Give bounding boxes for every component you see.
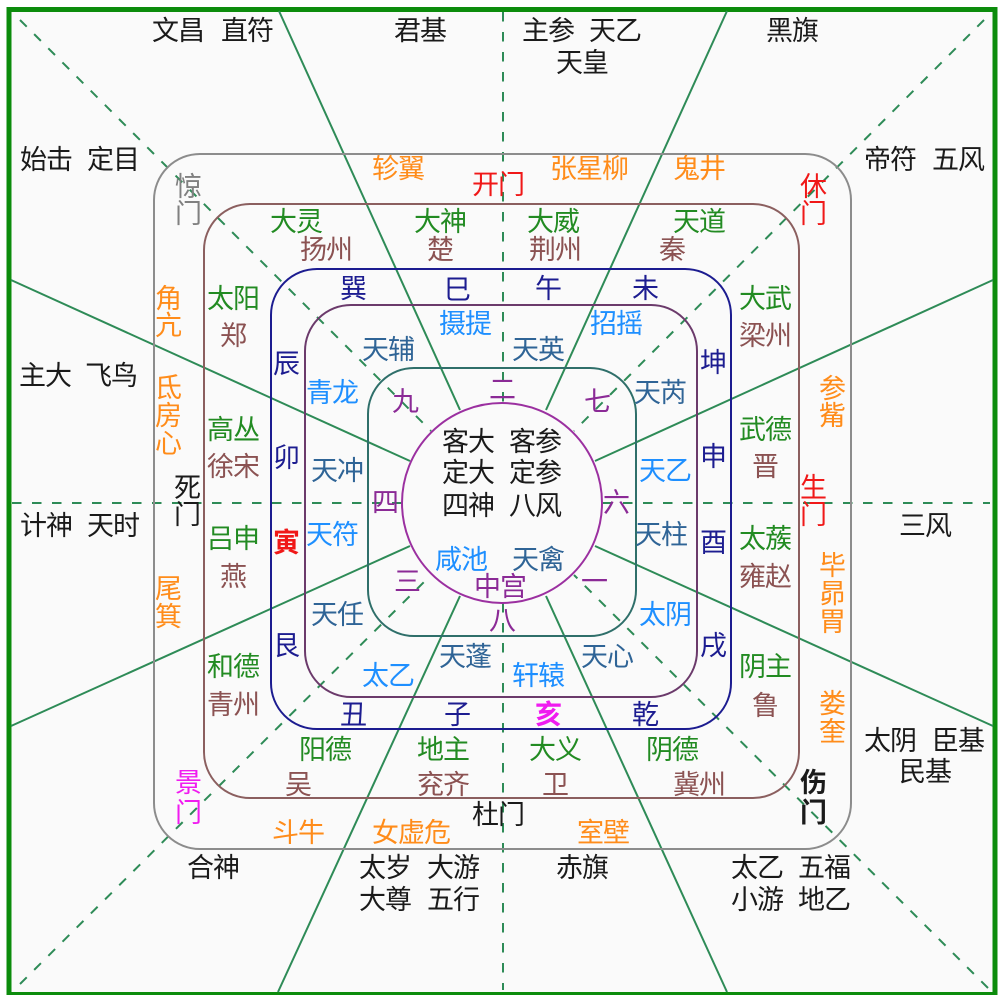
outer black labels: 直符 <box>221 16 273 46</box>
blue branch labels: 坤 <box>700 348 726 378</box>
brown region labels: 扬州 <box>300 235 352 265</box>
eight gates: 生 <box>800 473 826 503</box>
purple palace numbers: 七 <box>584 387 610 417</box>
eight gates: 惊 <box>175 172 201 202</box>
brown region labels: 徐宋 <box>207 452 260 482</box>
outer black labels: 五风 <box>932 145 985 175</box>
outer black labels: 五行 <box>427 885 479 915</box>
green deity labels <box>207 207 792 765</box>
green deity labels: 吕申 <box>207 524 259 554</box>
light blue star labels: 咸池 <box>435 545 487 575</box>
green deity labels: 和德 <box>207 652 259 682</box>
purple palace numbers: 四 <box>372 488 398 518</box>
blue branch labels: 亥 <box>535 700 561 730</box>
outer black labels: 大游 <box>427 853 479 883</box>
blue branch labels: 乾 <box>632 700 659 730</box>
outer black labels: 三风 <box>899 511 952 541</box>
steel blue star labels <box>311 335 687 672</box>
eight gates: 门 <box>175 798 201 828</box>
orange constellation labels: 昴 <box>819 579 845 609</box>
outer black labels: 合神 <box>187 853 239 883</box>
outer black labels: 天时 <box>87 511 139 541</box>
eight gates: 门 <box>800 199 826 229</box>
steel blue star labels: 天冲 <box>311 456 363 486</box>
light blue star labels: 招摇 <box>590 309 642 339</box>
light blue star labels: 青龙 <box>306 378 358 408</box>
brown region labels: 郑 <box>220 321 247 351</box>
center text block: 客参 <box>509 427 562 457</box>
orange constellation labels: 鬼井 <box>673 154 725 184</box>
brown region labels: 梁州 <box>739 321 791 351</box>
eight gates: 门 <box>800 798 826 828</box>
center text block <box>442 427 562 521</box>
outer black labels: 民基 <box>899 757 952 787</box>
outer black labels: 臣基 <box>932 726 985 756</box>
outer black labels: 五福 <box>798 853 850 883</box>
green deity labels: 太阳 <box>207 284 259 314</box>
eight gates: 门 <box>800 500 826 530</box>
purple palace numbers: 六 <box>603 488 629 518</box>
blue branch labels: 寅 <box>273 528 299 558</box>
green deity labels: 阴主 <box>739 652 791 682</box>
outer black labels: 小游 <box>731 885 783 915</box>
green deity labels: 阳德 <box>299 735 351 765</box>
orange constellation labels: 轸翼 <box>372 154 424 184</box>
purple palace numbers: 二 <box>489 375 515 405</box>
blue branch labels: 巳 <box>444 275 470 305</box>
ring: brown <box>204 204 799 798</box>
eight gates: 门 <box>174 500 200 530</box>
steel blue star labels: 天任 <box>311 600 363 630</box>
outer black labels: 主大 <box>19 361 71 391</box>
steel blue star labels: 天英 <box>512 335 565 365</box>
green deity labels: 大威 <box>527 207 580 237</box>
blue branch labels: 子 <box>444 700 470 730</box>
outer black labels: 君基 <box>394 16 447 46</box>
orange constellation labels: 女虚危 <box>372 818 450 848</box>
outer black labels: 太阴 <box>864 726 916 756</box>
blue branch labels: 卯 <box>273 443 299 473</box>
blue branch labels: 艮 <box>273 631 300 661</box>
center text block: 八风 <box>509 491 562 521</box>
light blue star labels <box>306 309 691 691</box>
brown region labels: 燕 <box>220 562 246 592</box>
ring: purple <box>305 305 697 697</box>
eight gates: 休 <box>800 172 827 202</box>
orange constellation labels: 尾 <box>155 574 181 604</box>
outer black labels: 始击 <box>20 145 72 175</box>
orange constellation labels: 氐 <box>155 373 181 403</box>
brown region labels: 卫 <box>542 770 568 800</box>
light blue star labels: 太乙 <box>362 661 414 691</box>
green deity labels: 太蔟 <box>739 524 791 554</box>
orange constellation labels: 胃 <box>819 607 845 637</box>
eight gates <box>174 170 827 830</box>
orange constellation labels: 斗牛 <box>272 818 324 848</box>
purple palace numbers: 九 <box>392 387 419 417</box>
brown region labels: 荆州 <box>529 235 581 265</box>
orange constellation labels: 张星柳 <box>550 154 628 184</box>
brown region labels: 鲁 <box>752 691 778 721</box>
purple palace numbers <box>372 375 629 636</box>
brown region labels <box>207 235 792 800</box>
center text block: 定大 <box>442 458 494 488</box>
light blue star labels: 太阴 <box>639 600 691 630</box>
green deity labels: 阴德 <box>646 735 698 765</box>
outer black labels: 主参 <box>522 16 575 46</box>
orange constellation labels: 室壁 <box>577 818 629 848</box>
orange constellation labels: 觜 <box>819 401 845 431</box>
orange constellation labels: 房 <box>155 401 181 431</box>
blue branch labels: 丑 <box>340 700 366 730</box>
outer black labels: 黑旗 <box>766 16 818 46</box>
purple palace numbers: 一 <box>581 567 607 597</box>
steel blue star labels: 天柱 <box>635 520 687 550</box>
outer black labels: 计神 <box>20 511 72 541</box>
orange constellation labels: 奎 <box>819 717 846 747</box>
light blue star labels: 天乙 <box>639 456 691 486</box>
center circle <box>402 403 602 603</box>
brown region labels: 秦 <box>659 235 686 265</box>
blue branch labels: 午 <box>535 274 561 304</box>
green deity labels: 大神 <box>414 207 466 237</box>
eight gates: 景 <box>175 768 201 798</box>
brown region labels: 晋 <box>752 452 778 482</box>
steel blue star labels: 天蓬 <box>439 642 491 672</box>
green deity labels: 武德 <box>739 415 791 445</box>
purple palace numbers: 中宫 <box>474 572 526 602</box>
eight gates: 门 <box>175 199 201 229</box>
brown region labels: 兖齐 <box>417 770 470 800</box>
center text block: 客大 <box>442 427 494 457</box>
blue branch labels: 辰 <box>273 349 300 379</box>
brown region labels: 冀州 <box>673 770 725 800</box>
purple palace numbers: 三 <box>394 567 420 597</box>
eight gates: 开门 <box>472 170 524 200</box>
green deity labels: 大武 <box>739 284 792 314</box>
blue branch labels: 酉 <box>700 528 726 558</box>
blue branch labels: 未 <box>632 274 659 304</box>
green deity labels: 大灵 <box>270 207 323 237</box>
eight gates: 伤 <box>800 768 826 798</box>
brown region labels: 楚 <box>427 235 453 265</box>
orange constellation labels: 亢 <box>155 311 182 341</box>
blue branch labels: 巽 <box>340 274 366 304</box>
outer black labels: 帝符 <box>864 145 916 175</box>
outer black labels: 太乙 <box>731 853 783 883</box>
orange constellation labels: 娄 <box>819 689 845 719</box>
outer black labels: 地乙 <box>798 885 850 915</box>
green deity labels: 天道 <box>673 207 725 237</box>
green deity labels: 地主 <box>417 735 469 765</box>
brown region labels: 吴 <box>285 770 311 800</box>
orange constellation labels: 心 <box>155 429 182 459</box>
light blue star labels: 天符 <box>306 520 358 550</box>
steel blue star labels: 天辅 <box>362 335 414 365</box>
light blue star labels: 摄提 <box>439 309 492 339</box>
ring: outer gray <box>154 154 851 849</box>
green deity labels: 大义 <box>529 735 581 765</box>
steel blue star labels: 天心 <box>581 642 634 672</box>
brown region labels: 青州 <box>207 690 259 720</box>
outer black labels: 定目 <box>87 145 139 175</box>
steel blue star labels: 天芮 <box>634 378 686 408</box>
outer black labels: 飞鸟 <box>85 361 137 391</box>
blue branch labels <box>273 274 727 730</box>
center text block: 定参 <box>509 458 562 488</box>
ring: teal <box>368 368 636 636</box>
purple palace numbers: 八 <box>489 606 516 636</box>
outer black labels: 天乙 <box>589 16 641 46</box>
orange constellation labels: 毕 <box>819 551 845 581</box>
outer black labels: 太岁 <box>359 853 411 883</box>
eight gates: 杜门 <box>472 800 524 830</box>
ring: blue <box>271 269 731 729</box>
green deity labels: 高丛 <box>207 415 259 445</box>
light blue star labels: 轩辕 <box>512 661 565 691</box>
outer black labels: 文昌 <box>152 16 204 46</box>
blue branch labels: 戌 <box>700 631 727 661</box>
outer black labels: 天皇 <box>556 48 608 78</box>
center text block: 四神 <box>442 491 494 521</box>
brown region labels: 雍赵 <box>739 562 792 592</box>
outer black labels: 大尊 <box>359 885 411 915</box>
orange constellation labels: 箕 <box>155 602 181 632</box>
blue branch labels: 申 <box>700 442 726 472</box>
outer black labels: 赤旗 <box>556 853 608 883</box>
steel blue star labels: 天禽 <box>512 545 565 575</box>
eight gates: 死 <box>174 473 200 503</box>
orange constellation labels: 角 <box>155 284 181 314</box>
orange constellation labels <box>155 154 846 848</box>
orange constellation labels: 参 <box>819 374 846 404</box>
